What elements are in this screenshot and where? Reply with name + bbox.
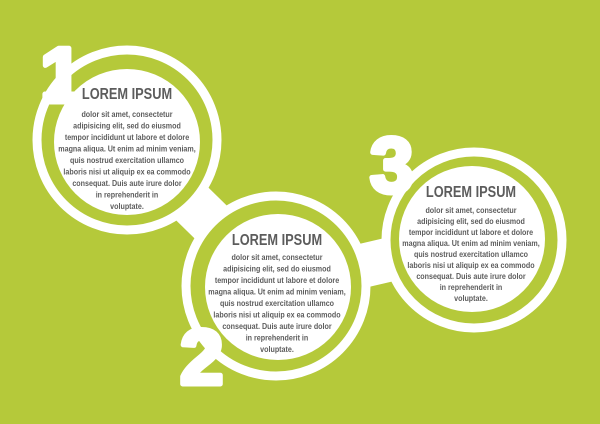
body 3: magna aliqua. Ut enim ad minim veniam, [402,238,540,248]
heading 2: LOREM IPSUM [232,232,322,249]
body 1: dolor sit amet, consectetur [81,109,173,119]
body 3: consequat. Duis aute irure dolor [416,271,526,281]
body 2: magna aliqua. Ut enim ad minim veniam, [208,287,346,297]
body 1: consequat. Duis aute irure dolor [72,178,182,188]
body 3 [402,205,540,303]
body 3: tempor incididunt ut labore et dolore [409,227,534,237]
body 2: consequat. Duis aute irure dolor [222,321,332,331]
body 1: in reprehenderit in [96,190,159,200]
number 1: 1 [40,31,83,119]
body 3: in reprehenderit in [440,282,503,292]
body 2: tempor incididunt ut labore et dolore [215,275,340,285]
circle 1 [37,31,217,230]
body 2: voluptate. [260,344,294,354]
body 3: adipisicing elit, sed do eiusmod [417,216,525,226]
body 2: quis nostrud exercitation ullamco [220,298,334,308]
body 3: quis nostrud exercitation ullamco [414,249,528,259]
body 2: adipisicing elit, sed do eiusmod [223,264,331,274]
body 3: laboris nisi ut aliquip ex ea commodo [407,260,535,270]
body 1: voluptate. [110,201,144,211]
connectors [127,140,473,286]
number 2: 2 [180,313,223,401]
circle 3 [370,121,562,328]
body 1: quis nostrud exercitation ullamco [70,155,184,165]
body 3: dolor sit amet, consectetur [425,205,517,215]
body 2: in reprehenderit in [246,333,309,343]
number 3: 3 [370,121,413,209]
body 1: laboris nisi ut aliquip ex ea commodo [63,167,191,177]
body 1 [58,109,196,211]
body 1: magna aliqua. Ut enim ad minim veniam, [58,144,196,154]
heading 3: LOREM IPSUM [426,184,516,201]
circle 2 [180,196,366,401]
body 3: voluptate. [454,293,488,303]
body 2: laboris nisi ut aliquip ex ea commodo [213,310,341,320]
heading 1: LOREM IPSUM [82,86,172,103]
body 2: dolor sit amet, consectetur [231,252,323,262]
body 2 [208,252,346,354]
body 1: tempor incididunt ut labore et dolore [65,132,190,142]
body 1: adipisicing elit, sed do eiusmod [73,121,181,131]
